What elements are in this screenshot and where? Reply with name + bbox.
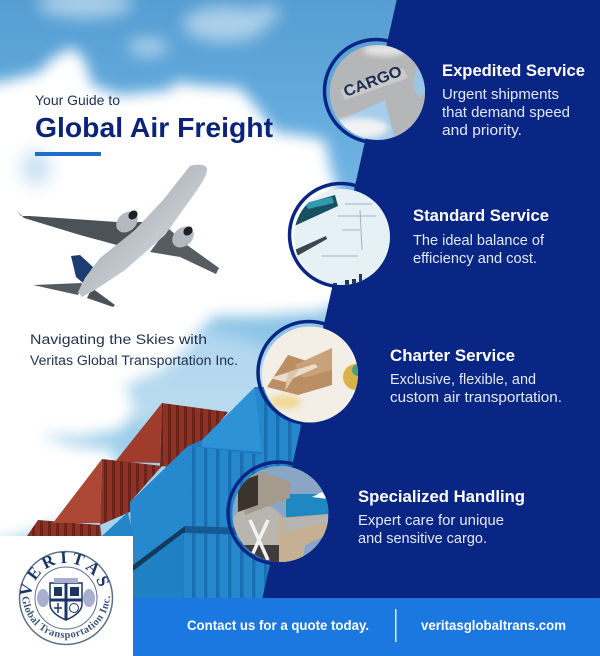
fuselage xyxy=(78,165,207,297)
service: expedited: and priority. xyxy=(442,123,522,139)
right wing xyxy=(150,228,219,274)
service: charter: Exclusive, flexible, and xyxy=(390,372,536,388)
airplane xyxy=(17,165,219,307)
tail fin xyxy=(71,255,93,283)
logo tagline: Global Transportation Inc. xyxy=(22,596,110,640)
service: expedited: that demand speed xyxy=(442,105,570,121)
service: standard xyxy=(413,206,549,267)
service: standard: The ideal balance of xyxy=(413,233,545,249)
logo wordmark: V E R I T A S xyxy=(20,552,109,595)
service: specialized handling: Expert care for unique xyxy=(358,513,504,529)
service: specialized handling xyxy=(358,487,525,547)
stabilizers xyxy=(33,283,82,295)
photo: cargo plane xyxy=(324,40,430,145)
heading: your guide to: Your Guide to xyxy=(35,92,120,108)
service: charter: Charter Service xyxy=(390,346,515,365)
left wing xyxy=(17,211,145,248)
logo shield xyxy=(37,578,95,620)
photo: cargo plane: CARGO xyxy=(341,63,404,101)
service: expedited: Urgent shipments xyxy=(442,87,559,103)
photo: documents xyxy=(290,184,395,290)
service: specialized handling: and sensitive cargo. xyxy=(358,531,487,547)
footer contact bar: Contact us for a quote today. xyxy=(187,618,369,633)
service: charter xyxy=(390,346,562,406)
logo panel xyxy=(0,536,133,656)
service: charter: custom air transportation. xyxy=(390,390,562,406)
engines xyxy=(112,207,198,252)
footer contact bar: veritasglobaltrans.com xyxy=(421,618,566,633)
service: expedited xyxy=(442,61,585,139)
footer contact bar xyxy=(133,598,600,656)
title: Global Air Freight xyxy=(35,112,273,143)
subtitle: Veritas Global Transportation Inc. xyxy=(30,353,238,368)
service: standard: Standard Service xyxy=(413,206,549,225)
subtitle xyxy=(30,332,238,368)
shipping containers xyxy=(27,387,320,600)
photo: specialized handling xyxy=(228,462,331,567)
title underline xyxy=(35,152,101,156)
service: standard: efficiency and cost. xyxy=(413,251,537,267)
photo: parcels and toy plane xyxy=(258,322,369,425)
service: specialized handling: Specialized Handling xyxy=(358,487,525,506)
subtitle: Navigating the Skies with xyxy=(30,332,207,347)
service: expedited: Expedited Service xyxy=(442,61,585,80)
navy service panel xyxy=(262,0,600,600)
